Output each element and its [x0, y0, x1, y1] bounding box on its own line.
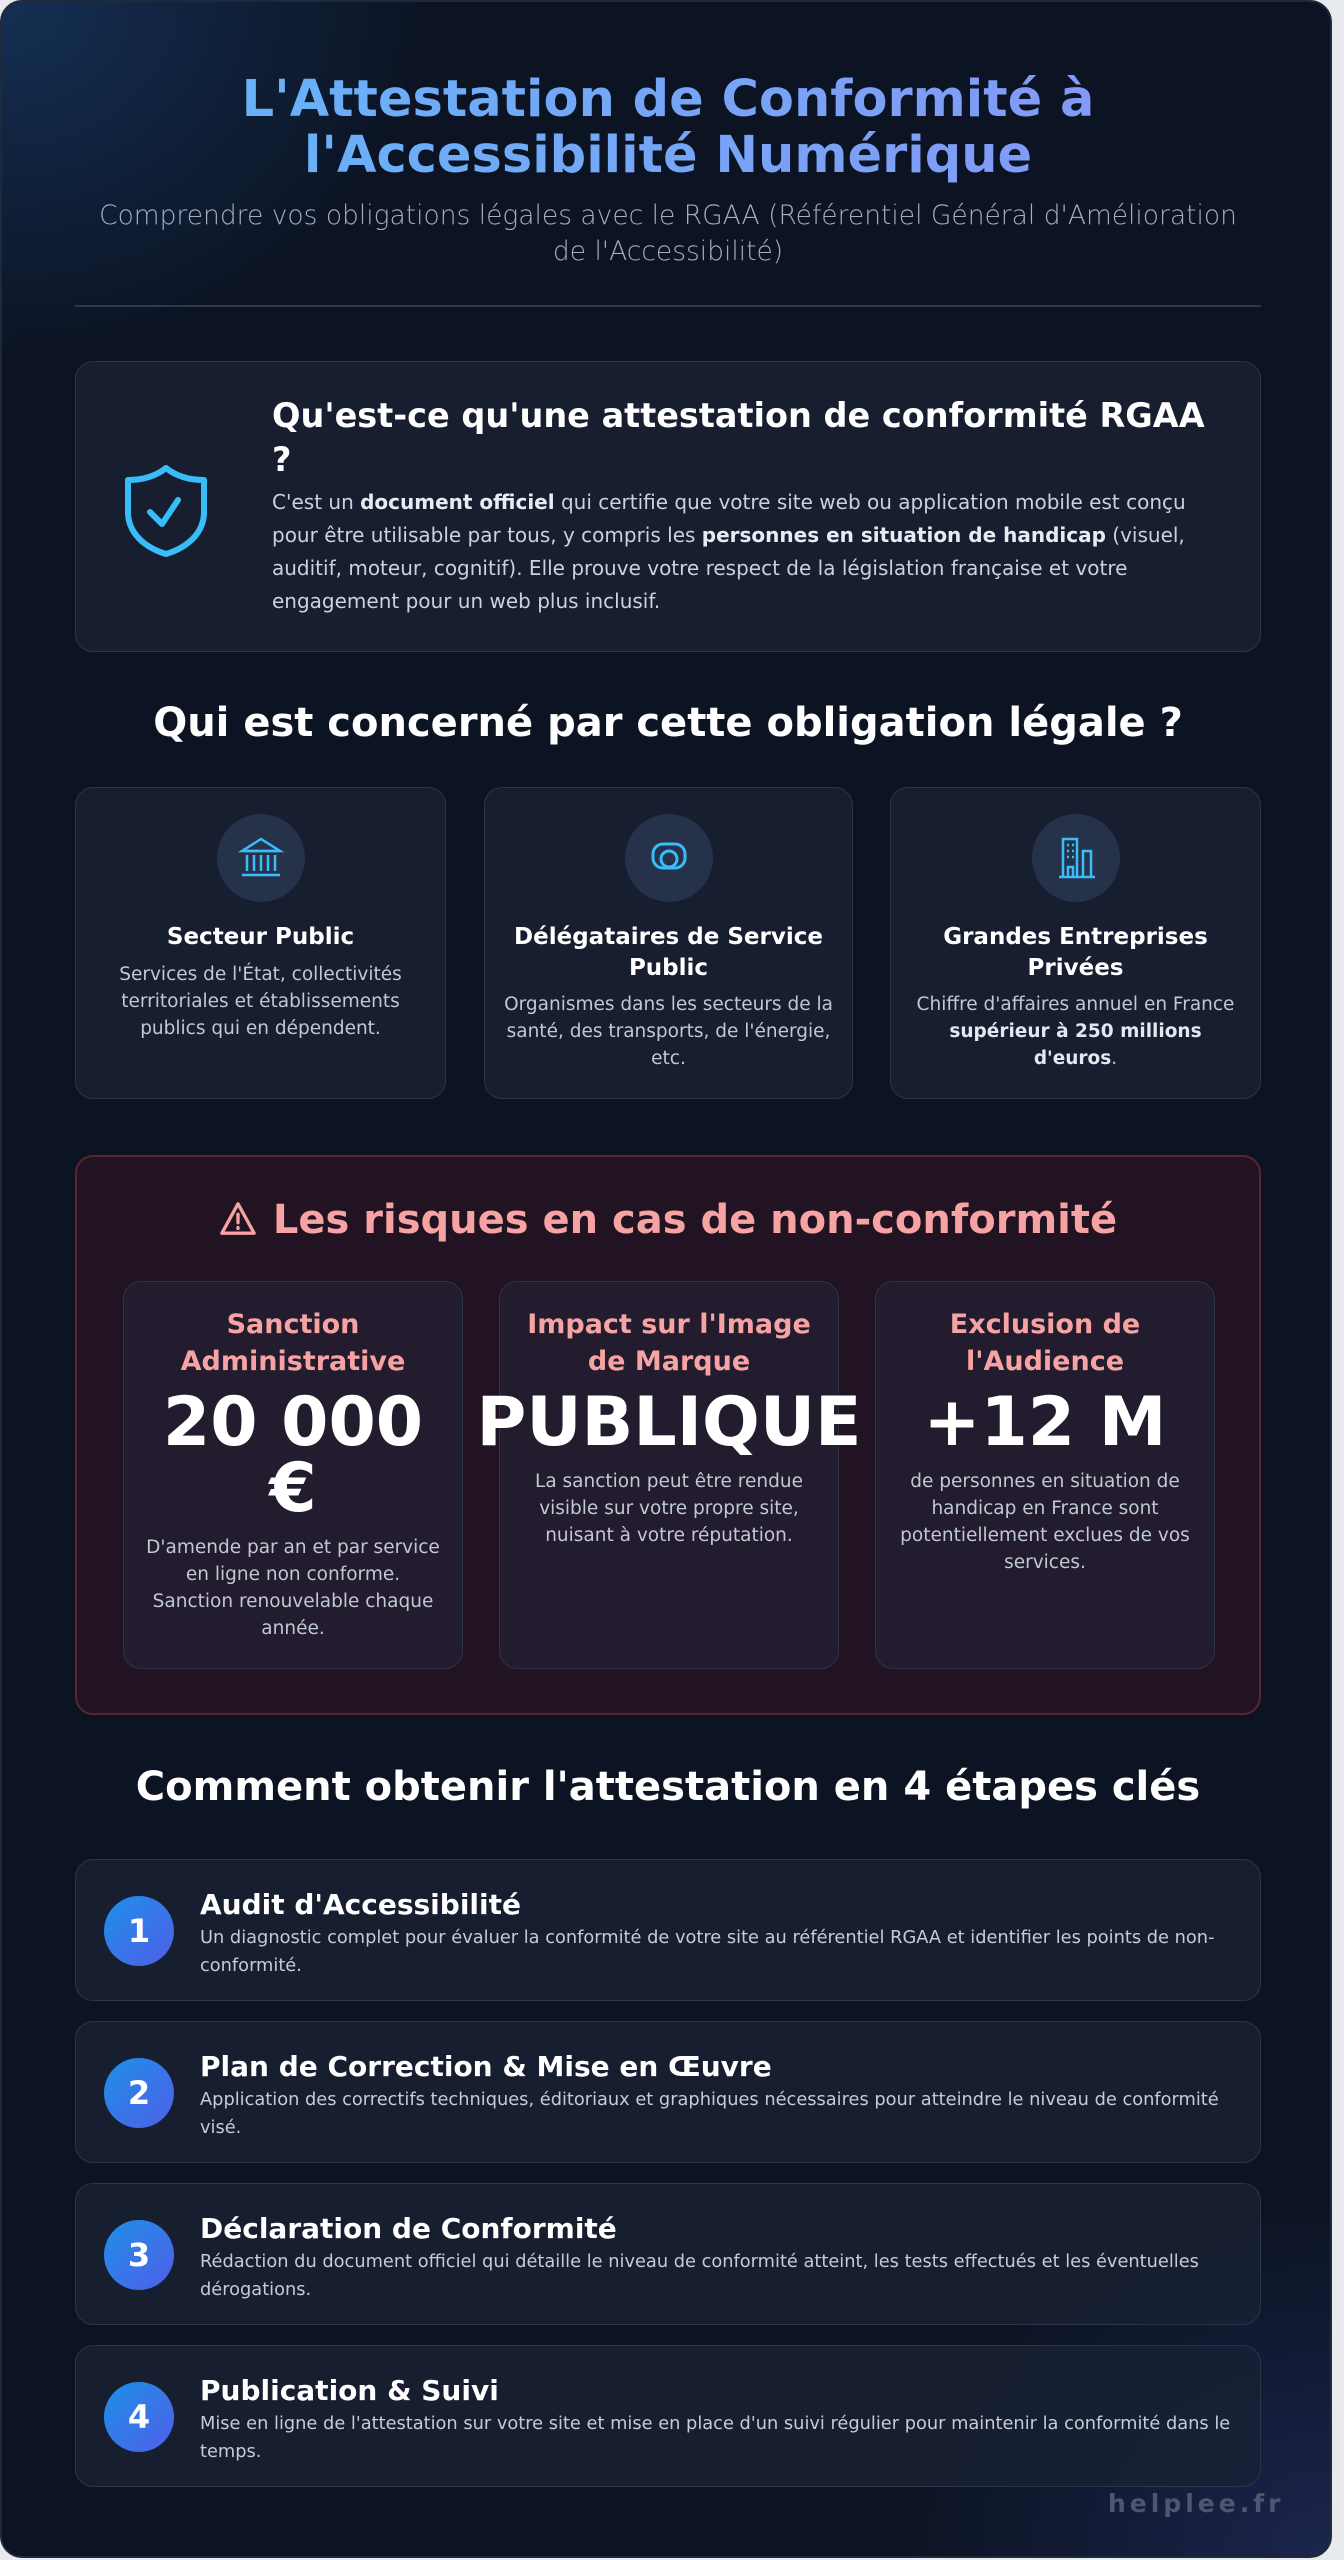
risk card: image: Impact sur l'Image de Marque: [527, 1309, 811, 1377]
risk card: sanction: Sanction Administrative: [181, 1309, 405, 1377]
title: [242, 70, 1094, 185]
subtitle: Comprendre vos obligations légales avec le RGAA (Référentiel Général d'Amélioration de l'Accessibilité): [99, 200, 1237, 267]
step 3: Rédaction du document officiel qui détaille le niveau de conformité atteint, les tests effectués et les éventuelles dérogations.: [200, 2251, 1199, 2300]
step 3: [75, 2183, 1261, 2325]
panel: délégataires: Délégataires de Service Public: [514, 924, 823, 981]
panel: entreprises: Chiffre d'affaires annuel en France supérieur à 250 millions d'euros.: [917, 994, 1234, 1069]
risk card: audience: Exclusion de l'Audience: [950, 1309, 1140, 1377]
panel: secteur public: [75, 787, 446, 1099]
panel: délégataires: [484, 787, 853, 1099]
risk card: audience: de personnes en situation de handicap en France sont potentiellement exclues de vos services.: [900, 1471, 1190, 1573]
step 3: Déclaration de Conformité: [200, 2212, 617, 2245]
panel: entreprises: [890, 787, 1261, 1099]
panel: definition: [75, 361, 1261, 652]
step 2: Plan de Correction & Mise en Œuvre: [200, 2050, 772, 2083]
step 2: 2: [128, 2074, 150, 2112]
risk card: image: [499, 1281, 839, 1669]
text: definition: C'est un document officiel qui certifie que votre site web ou application mobile est conçu pour être utilisable par tous, y compris les personnes en situation de handicap (visuel, auditif, moteur, cognitif). Elle prouve votre respect de la législation française et votre engagement pour un web plus inclusif.: [272, 490, 1186, 613]
risk card: audience: +12 M: [924, 1383, 1166, 1462]
heading: steps: Comment obtenir l'attestation en 4 étapes clés: [136, 1764, 1200, 1810]
icon: bank: [216, 814, 304, 902]
panel: risks: [75, 1155, 1261, 1715]
step 4: Mise en ligne de l'attestation sur votre site et mise en place d'un suivi régulier pour maintenir la conformité dans le temps.: [200, 2413, 1230, 2462]
step 4: 4: [128, 2398, 150, 2436]
icon: shield check: [125, 464, 207, 557]
heading: risks: Les risques en cas de non-conformité: [273, 1197, 1117, 1243]
step 2: [75, 2021, 1261, 2163]
icon: building: [1032, 814, 1120, 902]
title: l'Accessibilité Numérique: [304, 126, 1032, 185]
step 4: [75, 2345, 1261, 2487]
risk card: sanction: €: [269, 1449, 317, 1528]
icon: service: [624, 814, 712, 902]
step 1: 1: [128, 1912, 150, 1950]
step 1: Audit d'Accessibilité: [200, 1888, 521, 1921]
risk card: sanction: [123, 1281, 463, 1669]
panel: entreprises: Grandes Entreprises Privées: [943, 924, 1208, 981]
risk card: image: La sanction peut être rendue visible sur votre propre site, nuisant à votre réputation.: [535, 1471, 803, 1546]
risk card: sanction: D'amende par an et par service en ligne non conforme. Sanction renouvelable chaque année.: [146, 1537, 440, 1639]
title: L'Attestation de Conformité à: [242, 70, 1094, 129]
panel: secteur public: Secteur Public: [167, 924, 354, 950]
panel: secteur public: Services de l'État, collectivités territoriales et établissements publics qui en dépendent.: [119, 964, 402, 1039]
heading: who: Qui est concerné par cette obligation légale ?: [153, 700, 1183, 746]
risk card: sanction: 20 000: [163, 1383, 423, 1462]
step 4: Publication & Suivi: [200, 2374, 499, 2407]
step 3: 3: [128, 2236, 150, 2274]
step 2: Application des correctifs techniques, éditoriaux et graphiques nécessaires pour atteindre le niveau de conformité visé.: [200, 2089, 1219, 2138]
step 1: [75, 1859, 1261, 2001]
risk card: image: PUBLIQUE: [476, 1383, 862, 1462]
step 1: Un diagnostic complet pour évaluer la conformité de votre site au référentiel RGAA et identifier les points de non-conformité.: [200, 1927, 1214, 1976]
risk card: audience: [875, 1281, 1215, 1669]
heading: definition: Qu'est-ce qu'une attestation de conformité RGAA ?: [272, 396, 1205, 479]
footer brand: helplee.fr: [1108, 2489, 1284, 2518]
panel: délégataires: Organismes dans les secteurs de la santé, des transports, de l'énergie, etc.: [504, 994, 833, 1069]
